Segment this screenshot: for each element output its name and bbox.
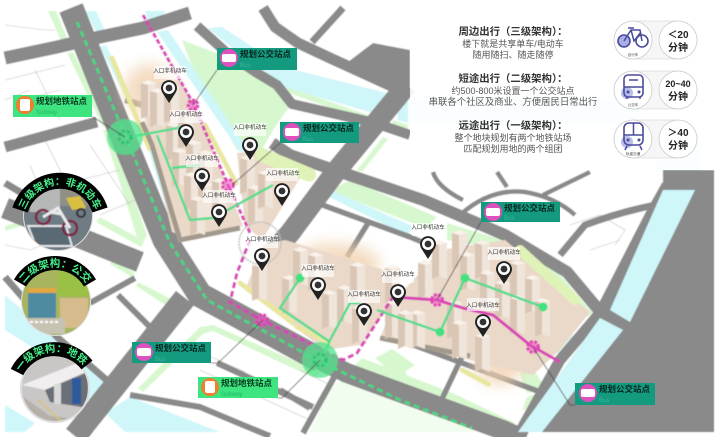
text: tier three: 周边出行（三级架构）： — [458, 25, 568, 38]
pin labels: 入口非机动车 — [381, 270, 415, 278]
pin labels: 入口非机动车 — [411, 223, 445, 231]
text: tier one: 匹配规划用地的两个组团 — [463, 143, 563, 154]
pin labels: 入口非机动车 — [266, 169, 300, 177]
entrance pins — [161, 80, 512, 337]
pin labels: 入口非机动车 — [466, 301, 500, 309]
stations — [107, 119, 338, 378]
pin labels: 入口非机动车 — [487, 248, 521, 256]
label: subway station top left: Subway — [36, 110, 57, 116]
text: tier one — [454, 119, 572, 154]
label: bus station 1: Bus — [240, 63, 250, 69]
icon row: bicycle under 20 minutes — [614, 21, 697, 59]
icon row: bus 20 to 40 minutes: 分钟 — [668, 90, 688, 103]
text: tier three: 随用随扫、随走随停 — [472, 49, 554, 60]
pin labels: 入口非机动车 — [301, 264, 335, 272]
right-hand grey riverbank — [520, 170, 714, 432]
label: bus station 2 — [280, 122, 359, 143]
big river — [518, 190, 695, 432]
pin labels: 入口非机动车 — [153, 66, 187, 74]
metro line — [77, 22, 472, 428]
pin labels: 入口非机动车 — [169, 110, 203, 118]
text: tier two: 约500-800米设置一个公交站点 — [451, 85, 575, 96]
panel: travel tiers — [410, 11, 714, 170]
photo badge: tier three bicycles — [12, 172, 108, 251]
pin labels: 入口非机动车 — [347, 290, 381, 298]
icon row: bicycle under 20 minutes: ＜20 — [667, 30, 689, 41]
icon row: bus 20 to 40 minutes: 公交车 — [628, 102, 639, 107]
green routes — [125, 127, 543, 360]
label: bus station 1: 规划公交站点 — [240, 49, 292, 59]
text: tier three: 楼下就是共享单车/电动车 — [462, 38, 564, 49]
peach glow — [124, 64, 525, 385]
label: subway station bottom: 规划地铁站点 — [221, 378, 273, 388]
photo badge: tier two bus: 二级架构：公交 — [19, 258, 92, 284]
pin labels: 入口非机动车 — [233, 123, 267, 131]
text: tier three — [458, 25, 568, 60]
pin labels: 入口非机动车 — [185, 154, 219, 162]
pin labels — [153, 66, 521, 311]
photo badge: tier one metro: 一级架构：地铁 — [17, 343, 88, 370]
text: tier one: 远途出行（一级架构）： — [458, 119, 568, 132]
text: tier one: 整个地块规划有两个地铁站场 — [454, 132, 572, 143]
icon row: bus 20 to 40 minutes — [614, 71, 697, 109]
label: bus station 4 — [575, 383, 655, 405]
label: bus station 2: Bus — [303, 137, 313, 143]
grey block north of the wide road — [348, 43, 410, 90]
label: bus station 3 — [481, 202, 560, 222]
photo badge: tier three bicycles: 三级架构：非机动车 — [18, 178, 102, 210]
text: tier two: 短途出行（二级架构）： — [458, 72, 568, 85]
icon row: bicycle under 20 minutes: 自行车 — [628, 52, 639, 57]
pin labels: 入口非机动车 — [202, 191, 236, 199]
text: tier two: 串联各个社区及商业、方便居民日常出行 — [429, 96, 597, 107]
label: bus station 4: Bus — [599, 398, 609, 404]
label: subway station top left — [13, 95, 92, 117]
label: bus station 4: 规划公交站点 — [599, 384, 651, 394]
photo badge: tier one metro — [10, 342, 92, 423]
icon row: metro over 40 minutes: 轨道交通 — [626, 151, 641, 156]
label: bus station 5: Bus — [155, 357, 165, 363]
text: tier two — [429, 72, 597, 107]
icon row: metro over 40 minutes — [614, 120, 697, 158]
planting strips — [112, 58, 575, 385]
label: bus station 3: 规划公交站点 — [504, 203, 556, 213]
bus line — [143, 15, 560, 362]
label: bus station 5: 规划公交站点 — [155, 343, 207, 353]
towers — [141, 80, 550, 372]
icon row: metro over 40 minutes: 分钟 — [668, 139, 688, 152]
label: bus station 3: Bus — [504, 216, 514, 222]
site fills — [137, 80, 590, 375]
icon row: bus 20 to 40 minutes: 20~40 — [665, 79, 691, 89]
label: subway station top left: 规划地铁站点 — [36, 96, 88, 106]
label: bus station 1 — [217, 48, 297, 70]
photo badge: tier two bus — [14, 256, 96, 336]
leader lines — [93, 70, 575, 405]
label: subway station bottom: Subway — [221, 392, 242, 398]
label: subway station bottom — [198, 377, 278, 398]
icon row: bicycle under 20 minutes: 分钟 — [668, 41, 688, 54]
icon row: metro over 40 minutes: ＞40 — [667, 128, 689, 139]
label: bus station 2: 规划公交站点 — [303, 123, 355, 133]
label: bus station 5 — [132, 342, 211, 363]
pin labels: 入口非机动车 — [245, 235, 279, 243]
thin plot lines — [5, 25, 625, 420]
